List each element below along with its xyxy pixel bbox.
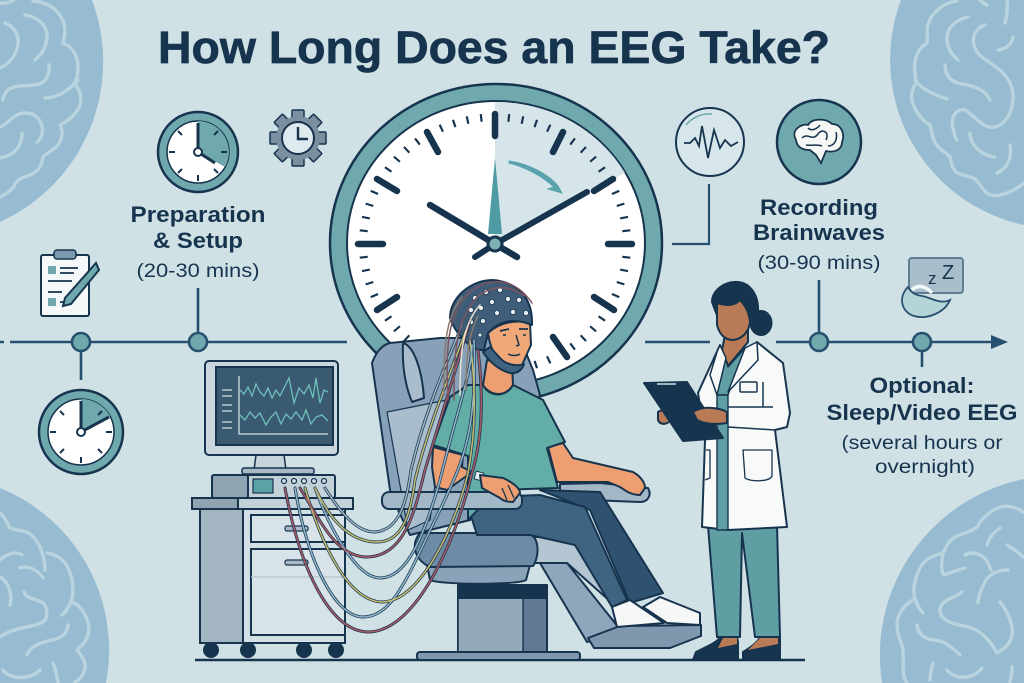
icon: gear clock [270, 110, 326, 166]
electrode wires [285, 282, 532, 632]
EEG monitor [205, 361, 338, 474]
icon: first stage clock [39, 390, 123, 474]
heading: Preparation & Setup: (20-30 mins) [136, 261, 260, 282]
icon: brain circle [777, 100, 861, 184]
title: How Long Does an EEG Take? [158, 22, 830, 73]
near armrest [382, 492, 522, 509]
decorative brain circle: bottom left [0, 488, 109, 683]
heading: Preparation & Setup: & Setup [153, 228, 243, 253]
icon: preparation clock [158, 112, 238, 192]
icon: sleep zzz [902, 258, 963, 317]
heading: Recording Brainwaves: (30-90 mins) [758, 253, 880, 274]
patient [433, 360, 700, 627]
medical cart [192, 475, 353, 658]
decorative brain circle: top left [0, 0, 103, 222]
timeline arrow [0, 280, 1008, 380]
icon: clipboard and pencil [41, 250, 99, 316]
heading: Optional Sleep/Video EEG: Optional: [870, 373, 974, 398]
heading: Recording Brainwaves: Brainwaves [753, 220, 885, 245]
patient head with EEG cap [450, 280, 532, 373]
reclining chair [372, 338, 701, 660]
big wall clock [330, 84, 662, 402]
doctor [644, 282, 790, 660]
heading: Optional Sleep/Video EEG: Sleep/Video EEG [826, 400, 1018, 425]
heading: Optional Sleep/Video EEG [826, 373, 1018, 478]
icon: sleep zzz: z [928, 269, 936, 288]
heading: Recording Brainwaves: Recording [760, 195, 878, 220]
heading: Recording Brainwaves [753, 195, 885, 274]
icon: sleep zzz: Z [942, 262, 954, 284]
decorative brain circle: top right [890, 0, 1024, 225]
floor line [195, 659, 805, 661]
heading: Preparation & Setup: Preparation [130, 202, 266, 227]
heading: Optional Sleep/Video EEG: (several hours or [842, 433, 1003, 454]
patient near arm and hand [432, 447, 520, 502]
heading: Optional Sleep/Video EEG: overnight) [875, 457, 975, 478]
decorative brain circle: bottom right [880, 479, 1024, 683]
connector line from wave icon [672, 184, 709, 244]
heading: Preparation & Setup [130, 202, 266, 282]
icon: heartbeat wave circle [676, 108, 744, 176]
